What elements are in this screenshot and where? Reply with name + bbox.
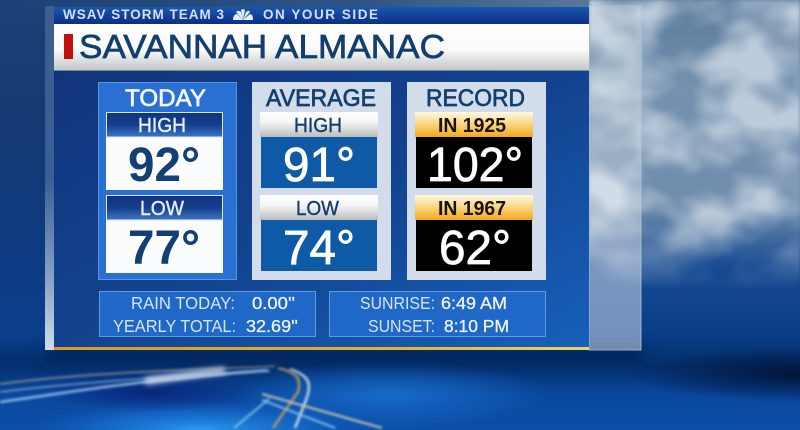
station name: WSAV STORM TEAM 3	[63, 7, 224, 22]
average high: HIGH	[294, 115, 342, 137]
record low	[415, 195, 533, 275]
left glass strip	[45, 6, 54, 350]
panel drop shadow	[44, 346, 644, 364]
right glass strip	[589, 6, 641, 350]
red accent	[64, 34, 73, 59]
bright floor glow	[10, 396, 390, 430]
heading: AVERAGE	[266, 85, 376, 112]
icon: peacock logo	[233, 9, 253, 20]
heading: TODAY	[125, 85, 206, 112]
today low: 77°	[128, 222, 200, 275]
panel: rain totals: 0.00''	[252, 293, 295, 313]
dark sky above the panel	[0, 0, 600, 8]
light streaks on the floor	[0, 366, 382, 428]
today low	[106, 195, 223, 275]
average low: LOW	[296, 198, 339, 220]
panel: today	[98, 82, 236, 280]
station banner	[54, 7, 589, 24]
dark sky on the left	[0, 0, 50, 360]
record low: 62°	[439, 222, 511, 275]
clouds on the right	[589, 0, 800, 290]
gold bottom rule	[54, 347, 589, 350]
record high	[415, 112, 533, 192]
title: SAVANNAH ALMANAC	[79, 28, 445, 65]
record low: IN 1967	[438, 198, 506, 220]
panel: average	[252, 82, 391, 280]
today high: HIGH	[138, 115, 186, 137]
panel: rain totals	[100, 292, 316, 336]
panel: sunrise and sunset: 8:10 PM	[444, 316, 509, 336]
main blue panel	[54, 71, 589, 348]
panel: rain totals: YEARLY TOTAL:	[113, 316, 236, 336]
panel: sunrise and sunset: 6:49 AM	[441, 293, 507, 313]
average low: 74°	[283, 222, 355, 275]
panel: record	[407, 82, 546, 280]
panel: rain totals: 32.69''	[246, 316, 298, 336]
panel: sunrise and sunset: SUNSET:	[368, 316, 435, 336]
average high: 91°	[283, 139, 355, 192]
dark horizon glow on the right	[630, 346, 800, 402]
blue floor centre	[230, 360, 550, 430]
average low	[260, 195, 378, 275]
panel: rain totals: RAIN TODAY:	[131, 293, 235, 313]
today high: 92°	[128, 139, 200, 192]
panel: sunrise and sunset: SUNRISE:	[360, 293, 435, 313]
record high: 102°	[427, 139, 523, 192]
today high	[106, 112, 223, 192]
slogan: ON YOUR SIDE	[263, 7, 378, 22]
panel: sunrise and sunset	[330, 292, 546, 336]
today low: LOW	[140, 198, 184, 220]
title bar	[54, 24, 589, 70]
deep navy wedge	[40, 372, 260, 412]
record high: IN 1925	[438, 115, 506, 137]
average high	[260, 112, 378, 192]
heading: RECORD	[426, 85, 525, 112]
